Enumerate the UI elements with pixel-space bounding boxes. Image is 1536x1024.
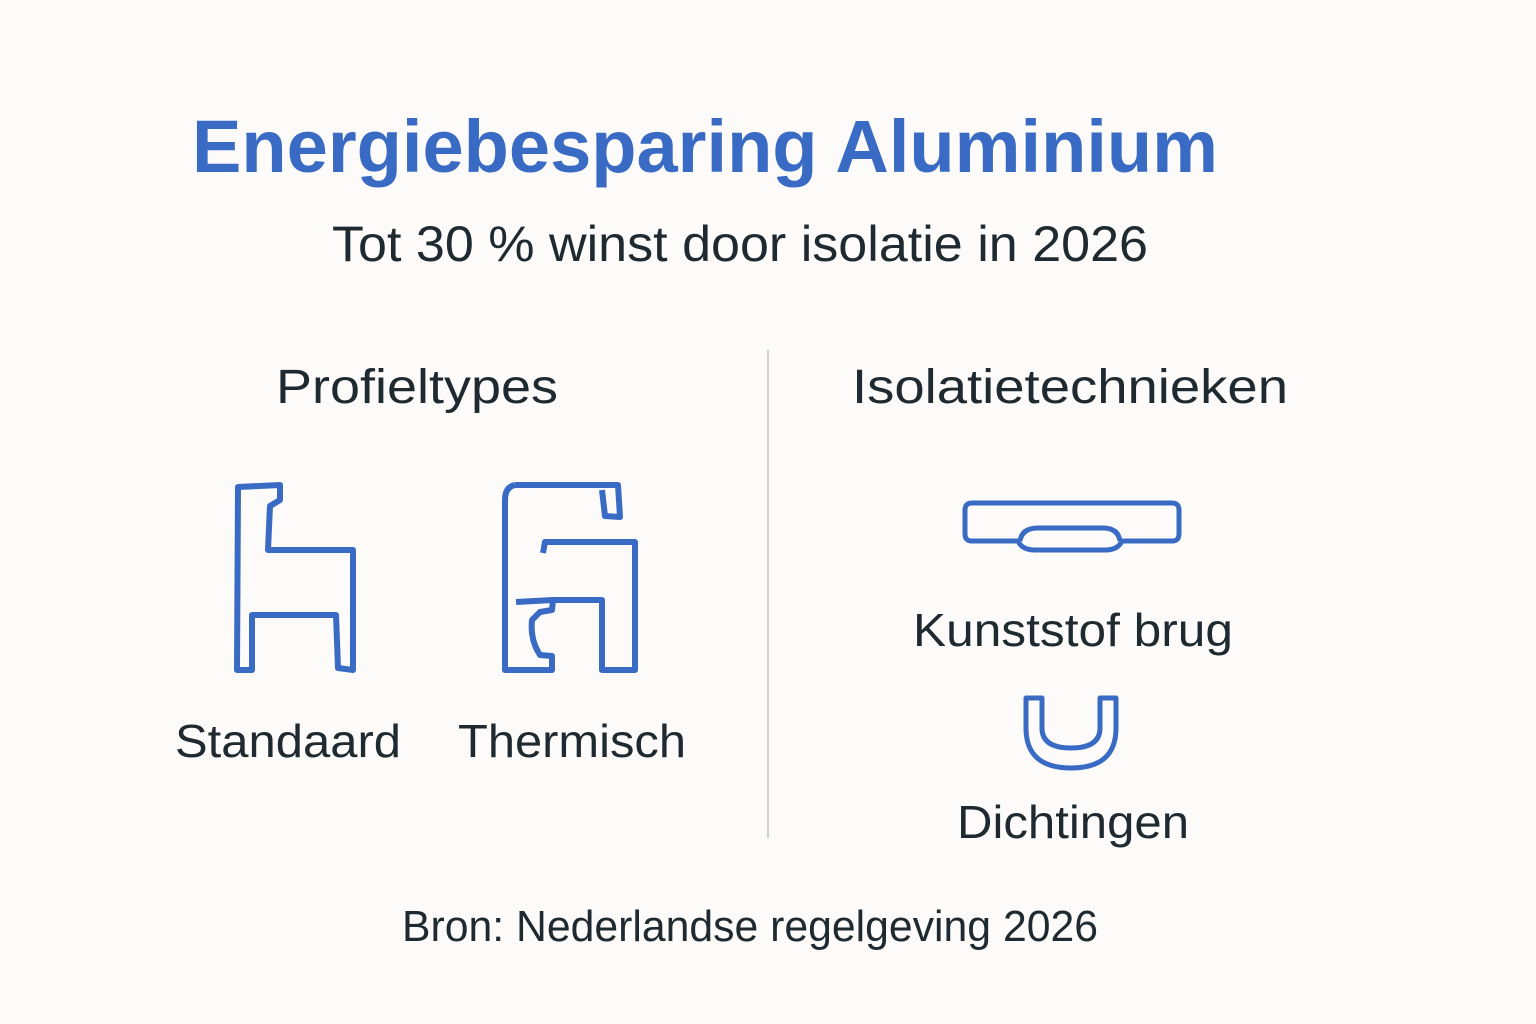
- label: Kunststof brug: Kunststof brug: [913, 604, 1233, 656]
- icon: standard profile: [237, 485, 353, 670]
- heading: Isolatietechnieken: Isolatietechnieken: [852, 361, 1288, 414]
- panel: isolatietechnieken: [852, 361, 1288, 848]
- label: Standaard: Standaard: [175, 715, 401, 767]
- label: Dichtingen: Dichtingen: [957, 796, 1189, 848]
- title: Energiebesparing Aluminium: [192, 105, 1218, 188]
- label: Thermisch: Thermisch: [458, 715, 686, 767]
- icon: seal: [1026, 698, 1116, 768]
- icon: thermal profile: [505, 485, 635, 670]
- subtitle: Tot 30 % winst door isolatie in 2026: [332, 216, 1148, 272]
- source note: Bron: Nederlandse regelgeving 2026: [402, 902, 1098, 951]
- heading: Profieltypes: Profieltypes: [276, 361, 558, 414]
- panel: profieltypes: [175, 361, 686, 767]
- icon: plastic bridge: [965, 503, 1179, 550]
